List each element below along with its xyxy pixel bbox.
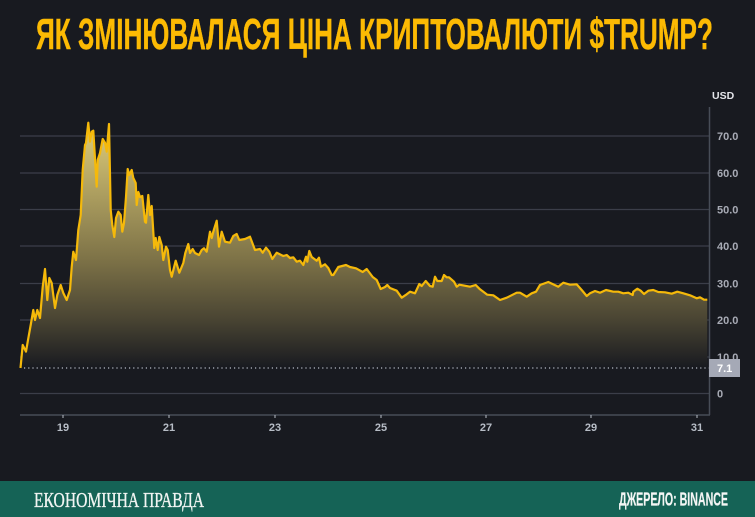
x axis: 23 <box>269 422 281 434</box>
chart: grid lines <box>20 136 709 394</box>
x axis: 31 <box>691 422 703 434</box>
footer band <box>0 481 755 517</box>
x axis: 25 <box>375 422 387 434</box>
chart: price line <box>20 123 707 368</box>
x axis: 29 <box>585 422 597 434</box>
chart: price area fill <box>20 123 707 368</box>
y axis: 30.0 <box>717 278 738 290</box>
y axis <box>710 107 738 415</box>
y axis: 10.0 <box>717 352 738 364</box>
y axis: 20.0 <box>717 315 738 327</box>
current price tag: 7.1 <box>717 363 732 375</box>
x axis: 21 <box>163 422 175 434</box>
chart: current level dotted line <box>24 367 709 369</box>
footer logo: ЕКОНОМІЧНА ПРАВДА <box>34 488 205 512</box>
x axis <box>20 415 710 434</box>
x axis: 19 <box>57 422 69 434</box>
y axis: 60.0 <box>717 168 738 180</box>
y axis: 40.0 <box>717 241 738 253</box>
y axis unit label: USD <box>712 90 735 102</box>
y axis: 0 <box>717 388 723 400</box>
y axis: 70.0 <box>717 131 738 143</box>
y axis: 50.0 <box>717 204 738 216</box>
x axis: 27 <box>480 422 492 434</box>
current price tag <box>709 359 740 377</box>
